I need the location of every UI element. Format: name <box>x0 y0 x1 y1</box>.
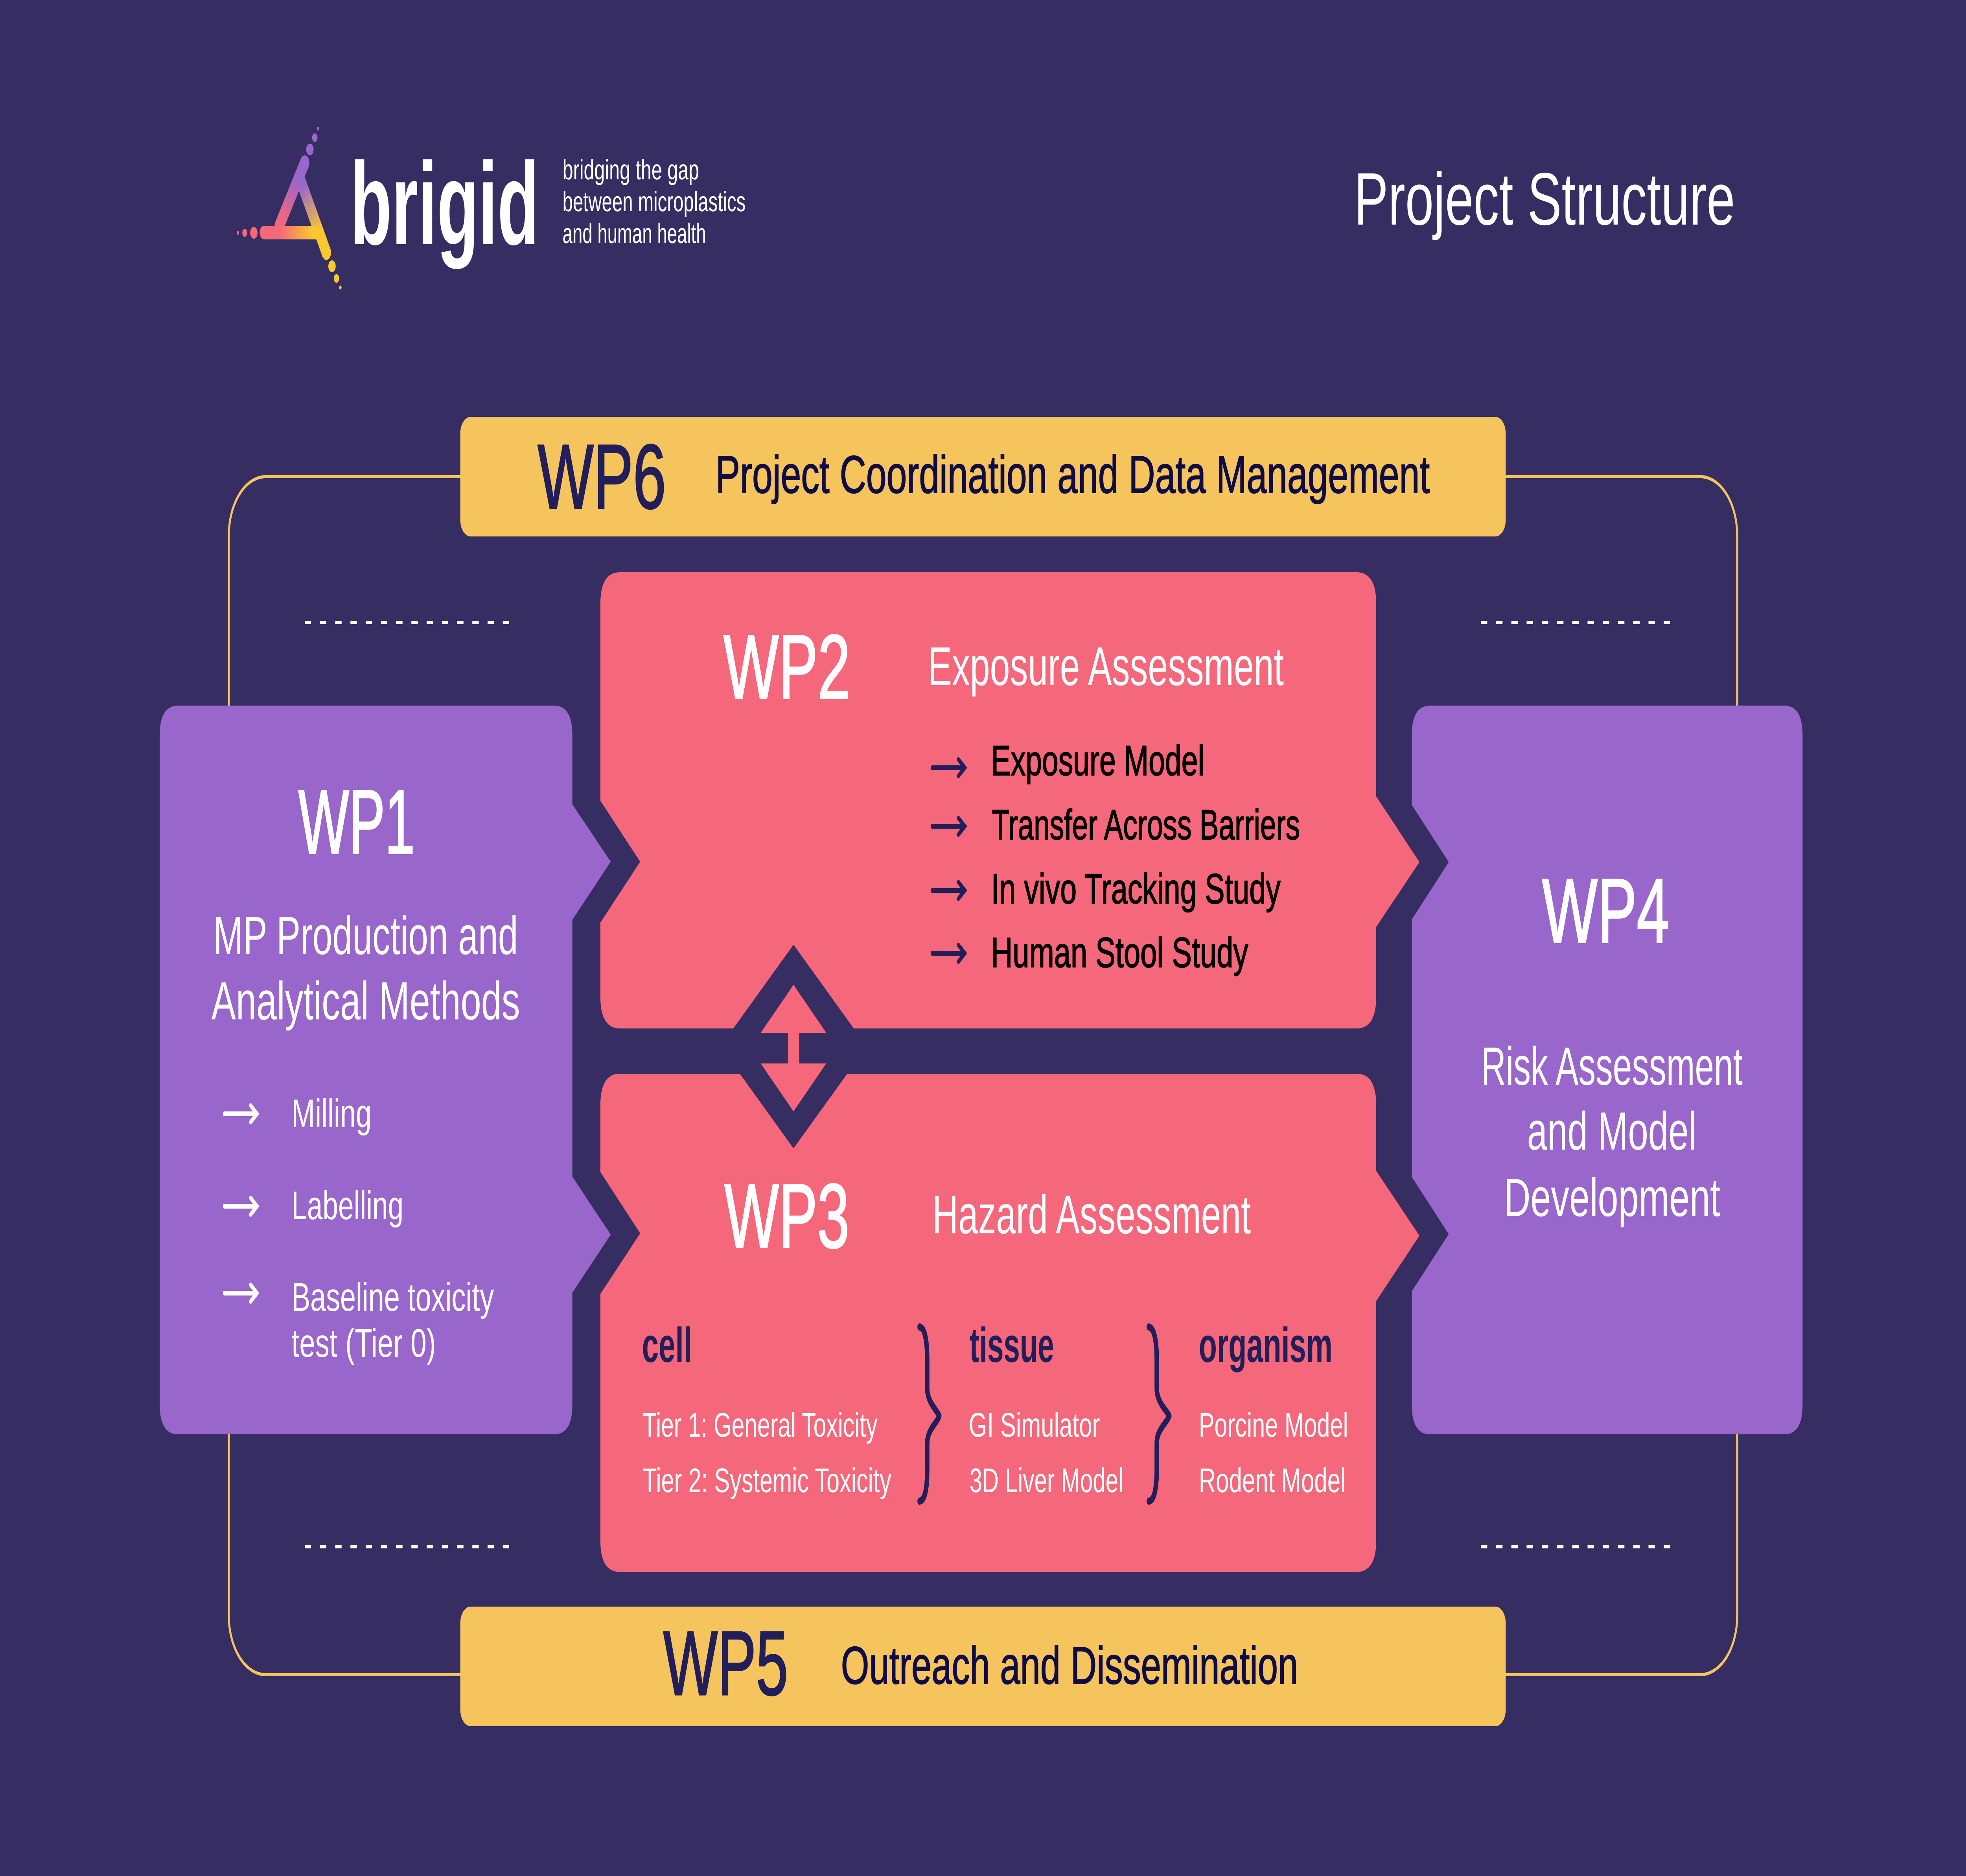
column: tissue: 3D Liver Model <box>970 1461 1123 1500</box>
WP1 arrows <box>225 1106 257 1301</box>
icon: two-way diamond arrow <box>720 945 867 1148</box>
column: organism: organism <box>1199 1318 1333 1373</box>
WP2 list: Human Stool Study <box>991 929 1248 976</box>
WP1 list: test (Tier 0) <box>291 1321 436 1366</box>
WP4 heading: and Model <box>1527 1101 1697 1161</box>
tagline: between microplastics <box>563 186 746 217</box>
WP2 list <box>991 737 1300 976</box>
WP4 heading <box>1481 1036 1743 1228</box>
WP3 heading: Hazard Assessment <box>932 1184 1251 1245</box>
connecting frame <box>229 477 1737 1675</box>
WP1 list: Milling <box>291 1091 372 1136</box>
WP5 description: Outreach and Dissemination <box>841 1636 1298 1695</box>
column: cell: Tier 1: General Toxicity <box>642 1406 878 1444</box>
title: Project Structure <box>1354 158 1735 241</box>
column: cell: Tier 2: Systemic Toxicity <box>642 1461 891 1500</box>
WP1 heading: Analytical Methods <box>212 971 520 1031</box>
WP1 heading: MP Production and <box>213 906 518 966</box>
column: cell: cell <box>642 1318 692 1373</box>
WP2 label: WP2 <box>723 616 850 718</box>
WP5 label: WP5 <box>663 1612 788 1714</box>
WP6 description: Project Coordination and Data Management <box>716 445 1430 504</box>
WP4 heading: Development <box>1504 1168 1720 1228</box>
column: tissue: tissue <box>970 1318 1054 1373</box>
column: cell <box>642 1318 891 1500</box>
WP2 heading: Exposure Assessment <box>928 636 1284 697</box>
WP1 list: Baseline toxicity <box>291 1275 494 1319</box>
WP1 list <box>291 1091 494 1366</box>
dashed separators <box>305 623 1670 1547</box>
WP1 list: Labelling <box>291 1183 403 1228</box>
WP4 label: WP4 <box>1542 860 1670 962</box>
WP2 list: In vivo Tracking Study <box>991 865 1281 912</box>
panel: WP6 <box>460 417 1506 536</box>
WP4 heading: Risk Assessment <box>1481 1036 1743 1096</box>
tagline: bridging the gap <box>563 155 699 186</box>
column: organism <box>1199 1318 1348 1500</box>
WP2 arrows <box>932 759 965 962</box>
icon: triangle mark <box>237 127 342 289</box>
brace: tissue to organism <box>1149 1327 1169 1501</box>
column: organism: Porcine Model <box>1199 1406 1348 1444</box>
WP1 label: WP1 <box>298 771 415 873</box>
WP3 label: WP3 <box>724 1165 849 1267</box>
WP1 heading <box>212 906 520 1031</box>
column: organism: Rodent Model <box>1199 1461 1346 1500</box>
panel: WP1 <box>160 706 611 1434</box>
wordmark: brigid <box>350 138 539 270</box>
column: tissue <box>969 1318 1123 1500</box>
panel: WP5 <box>460 1607 1506 1726</box>
panel: WP4 <box>1412 706 1802 1434</box>
panel: WP3 <box>600 1074 1419 1572</box>
brace: cell to tissue <box>920 1327 939 1501</box>
WP2 list: Transfer Across Barriers <box>992 801 1300 848</box>
column: tissue: GI Simulator <box>969 1406 1100 1444</box>
WP6 label: WP6 <box>538 426 666 528</box>
logo: brigid <box>237 127 746 289</box>
tagline: and human health <box>563 218 706 249</box>
WP2 list: Exposure Model <box>991 737 1204 784</box>
tagline <box>563 155 746 249</box>
panel: WP2 <box>600 572 1419 1028</box>
